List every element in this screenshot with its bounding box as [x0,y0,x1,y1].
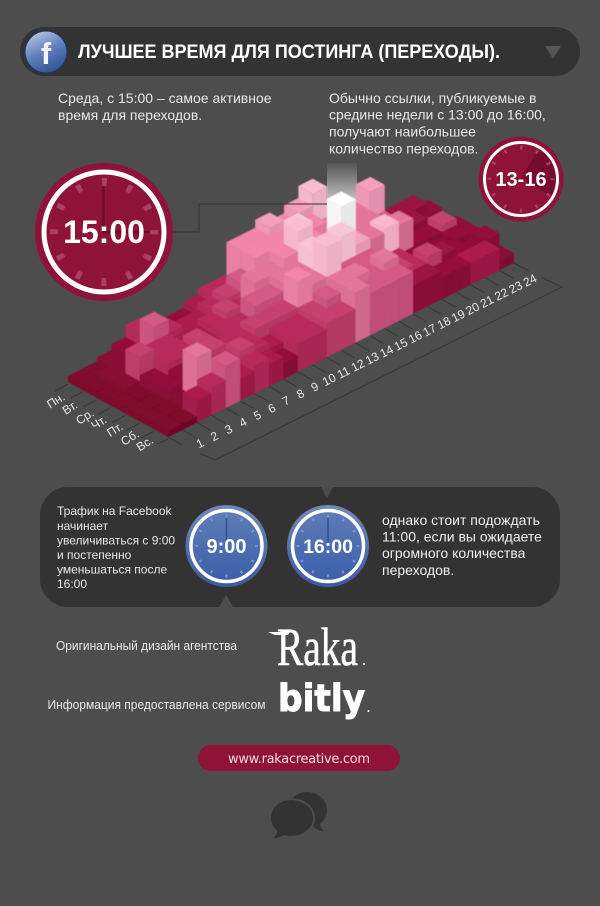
clock: 13-16 [478,136,564,222]
hour labels: 22 [492,285,511,304]
day labels: Вт. [60,398,80,418]
text: traffic start: уменьшаться после [57,562,167,576]
clock: 16:00 [287,505,369,587]
icon: dropdown triangle [545,46,561,59]
website url: www.rakacreative.com [228,752,370,767]
day labels: Пт. [104,419,125,440]
title: ЛУЧШЕЕ ВРЕМЯ ДЛЯ ПОСТИНГА (ПЕРЕХОДЫ). [78,42,500,63]
text: midweek note: количество переходов. [329,140,478,156]
hour labels: 4 [237,415,249,430]
bars: Monday [68,121,428,397]
clock: 15:00 [35,163,173,301]
text: traffic start: 16:00 [57,577,87,591]
header bar [20,27,580,76]
text: midweek note: средине недели с 13:00 до 16:00, [329,106,546,122]
hour labels: 6 [266,401,278,416]
clock label: 9:00 [206,536,247,558]
credit: data source: Информация предоставлена сервисом [48,698,266,712]
hour labels: 13 [363,349,382,368]
hour labels: 17 [420,321,439,339]
bars: Thursday [111,156,471,421]
hour labels: 16 [406,328,425,346]
hour labels: 8 [294,386,307,402]
text: wednesday note: Среда, с 15:00 – самое активное [58,90,272,106]
day labels: Пн. [44,390,67,411]
bars: Tuesday [82,141,442,405]
text: wait until 11:00: 11:00, если вы ожидаете [382,528,542,544]
clock label: 16:00 [303,536,353,558]
icon: facebook logo: f [41,36,52,71]
bars: Saturday [140,190,500,436]
hour labels: 5 [251,408,264,423]
bars: Wednesday [97,133,457,413]
connector from clock to peak bar [172,204,327,232]
hour labels: 9 [309,379,321,395]
hour labels: 21 [478,292,496,311]
hour labels: 11 [335,363,352,382]
text: traffic start: увеличиваться с 9:00 [57,534,175,548]
text: midweek note: получают наибольшее [329,124,476,140]
text: wait until 11:00: переходов. [382,562,454,578]
icon: speech bubbles [270,792,327,839]
hour labels: 1 [194,436,206,451]
text: wait until 11:00: однако стоит подождать [382,512,540,528]
clock: 9:00 [186,505,268,587]
logo: Raka: Raka [277,617,358,677]
hour labels: 7 [280,393,293,409]
hour labels: 15 [392,335,410,354]
hour labels: 2 [208,429,221,444]
day labels: Сб. [118,427,142,449]
text: wait until 11:00: огромного количества [382,545,526,561]
bars: Sunday [154,198,514,444]
website pill [198,745,400,771]
icon: facebook logo [23,29,69,75]
panel: facebook traffic [40,487,560,607]
day labels: Чт. [89,413,109,433]
bars: Friday [125,152,485,429]
hour labels: 10 [320,370,339,389]
text: traffic start: и постепенно [57,548,132,562]
hour labels: 18 [435,314,453,332]
bars: whole surface [68,121,514,444]
highlight beam [327,163,357,205]
chart axes and ticks [55,263,562,460]
text: traffic start: Трафик на Facebook [57,504,172,518]
day labels: Вс. [134,433,156,454]
hour labels: 3 [223,422,235,437]
clock label: 15:00 [63,214,145,250]
hour labels [194,271,539,451]
hour labels: 24 [521,271,539,290]
credit: design agency: Оригинальный дизайн агентства [56,639,237,653]
hour labels: 23 [507,278,525,297]
day labels: Ср. [73,406,97,427]
hour labels: 12 [349,356,367,375]
logo: bitly: bitly [278,677,365,720]
text: wednesday note: время для переходов. [58,107,202,123]
day labels [44,390,156,454]
text: midweek note: Обычно ссылки, публикуемые в [329,90,536,106]
hour labels: 20 [464,299,482,318]
hour labels: 14 [377,342,396,361]
hour labels: 19 [449,307,468,325]
3D chart: clicks by day and hour [44,121,562,460]
text: traffic start: начинает [57,519,109,533]
clock label: 13-16 [495,169,547,191]
